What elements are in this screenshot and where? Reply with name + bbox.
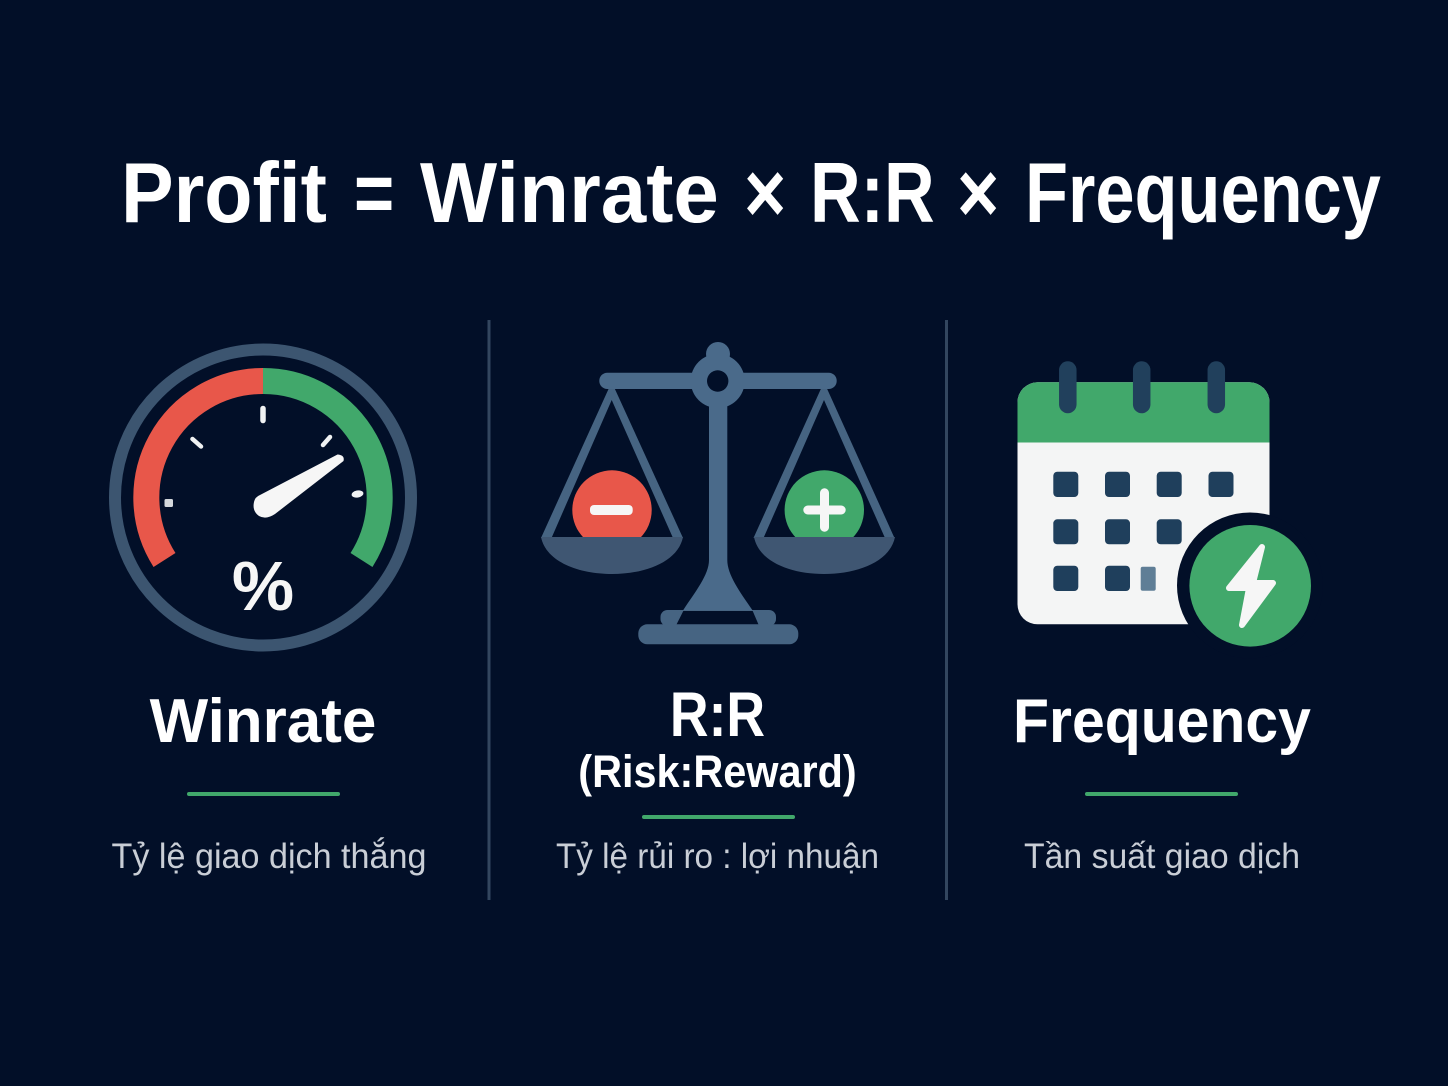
title: = bbox=[354, 146, 394, 241]
icon: gauge: % bbox=[232, 547, 294, 625]
icon: balance scale bbox=[541, 342, 895, 644]
title: R:R bbox=[810, 146, 934, 241]
title: Winrate bbox=[420, 146, 718, 241]
title: Frequency bbox=[1025, 146, 1381, 241]
subheading: risk reward: (Risk:Reward) bbox=[578, 746, 857, 796]
accent line bbox=[642, 815, 795, 819]
heading: R:R: R:R bbox=[670, 680, 765, 750]
panel: risk reward bbox=[541, 342, 895, 876]
icon: gauge bbox=[109, 344, 417, 652]
description: winrate: Tỷ lệ giao dịch thắng bbox=[112, 837, 426, 876]
title bbox=[121, 146, 1381, 241]
panel: winrate bbox=[109, 344, 426, 876]
heading: frequency: Frequency bbox=[1013, 687, 1311, 756]
icon: calendar with lightning bolt bbox=[1018, 361, 1311, 647]
title: × bbox=[956, 146, 999, 241]
accent line bbox=[1085, 792, 1238, 796]
description: frequency: Tần suất giao dịch bbox=[1024, 837, 1300, 876]
panel: frequency bbox=[1013, 361, 1311, 876]
title: × bbox=[744, 146, 786, 241]
description: risk reward: Tỷ lệ rủi ro : lợi nhuận bbox=[556, 837, 879, 876]
title: Profit bbox=[121, 146, 327, 241]
heading: winrate: Winrate bbox=[150, 687, 376, 756]
accent line bbox=[187, 792, 340, 796]
